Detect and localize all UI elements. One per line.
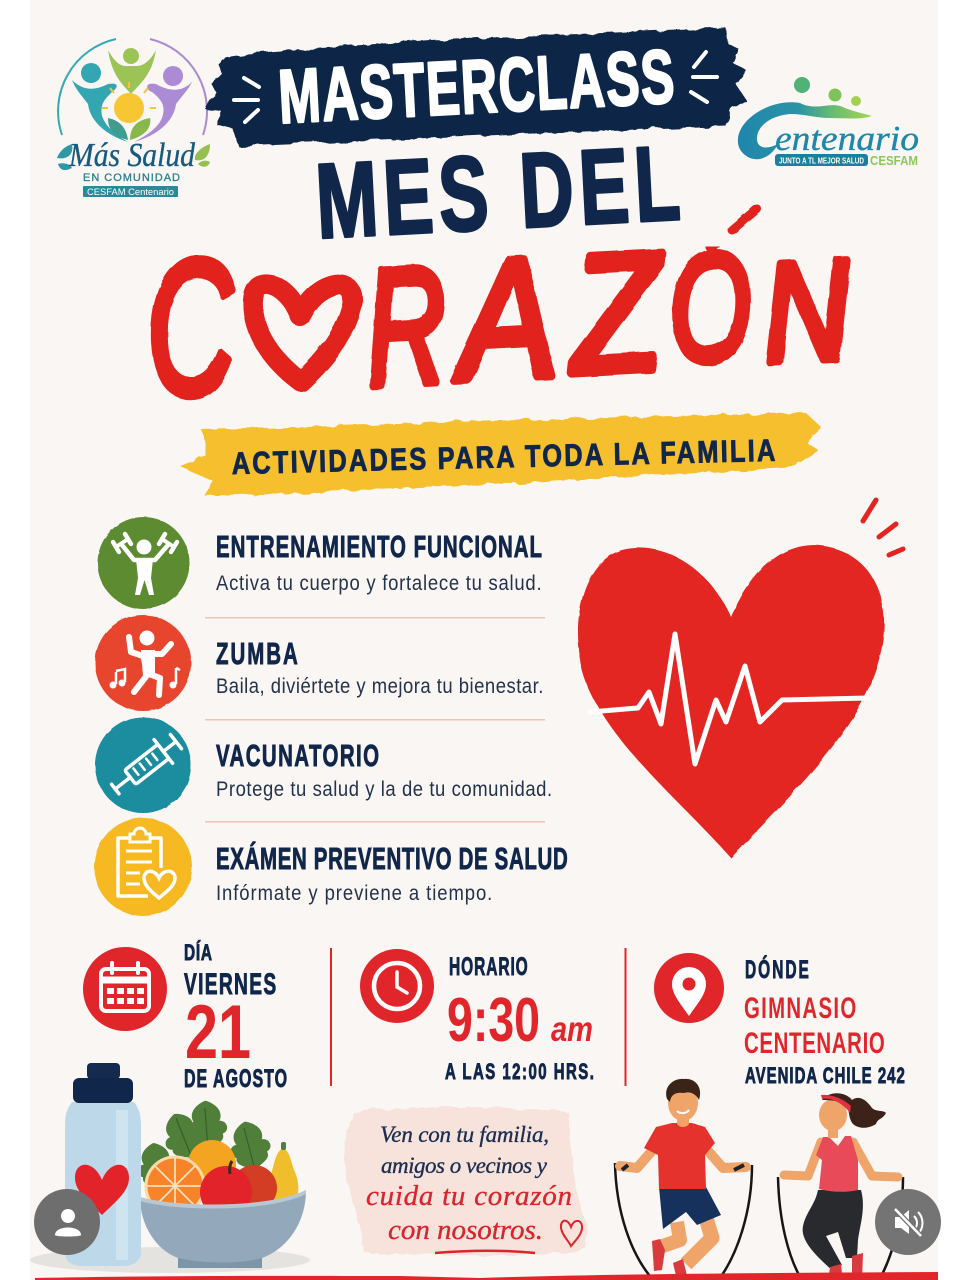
description: vacunatorio: Protege tu salud y la de tu comunidad. xyxy=(216,778,552,801)
info: location: DÓNDE xyxy=(745,955,809,984)
heading: MES DEL: MES DEL xyxy=(313,124,683,261)
illustration: water bottle xyxy=(65,1063,141,1266)
woman top xyxy=(816,1136,858,1192)
logo: Más Salud en Comunidad: EN COMUNIDAD xyxy=(83,172,180,184)
info: day xyxy=(83,940,287,1093)
icon: small heart xyxy=(561,1221,582,1246)
logo: Centenario CESFAM: CESFAM xyxy=(870,154,918,168)
activity: zumba xyxy=(95,615,543,711)
icon: dumbbell figure xyxy=(98,517,190,609)
activity: vacunatorio xyxy=(95,717,552,813)
man legs xyxy=(660,1222,680,1247)
info: day: 21 xyxy=(185,990,251,1075)
info: schedule: A LAS 12:00 HRS. xyxy=(445,1059,594,1084)
illustration: man jumping rope xyxy=(615,1079,752,1280)
man shoes xyxy=(652,1239,688,1280)
info: schedule xyxy=(360,949,594,1084)
woman shoes xyxy=(828,1253,863,1280)
title banner: MASTERCLASS xyxy=(206,28,746,146)
info: day: DE AGOSTO xyxy=(184,1066,287,1093)
logo: Más Salud en Comunidad: CESFAM Centenario xyxy=(87,187,174,198)
icon: syringe xyxy=(95,717,191,813)
description: entrenamiento: Activa tu cuerpo y fortalece tu salud. xyxy=(216,572,542,595)
activity: examen preventivo xyxy=(94,818,568,916)
pear xyxy=(268,1148,298,1206)
heading: CORAZÓN: C xyxy=(141,218,241,437)
heading: vacunatorio: VACUNATORIO xyxy=(216,738,379,773)
info: schedule: 9:30 xyxy=(447,986,540,1055)
man arms xyxy=(620,1152,746,1168)
activity: entrenamiento funcional xyxy=(98,517,542,609)
heading: CORAZÓN xyxy=(150,204,851,400)
icon: clipboard with heart xyxy=(94,818,192,916)
bottle heart xyxy=(75,1165,129,1215)
icon: calendar xyxy=(83,947,167,1031)
logo: Más Salud en Comunidad: Más Salud xyxy=(68,137,196,174)
man shorts xyxy=(659,1187,721,1229)
orange xyxy=(188,1140,236,1188)
callout: invitation: cuida tu corazón xyxy=(366,1180,572,1212)
heading: CORAZÓN: N xyxy=(759,230,854,392)
rope xyxy=(615,1163,752,1280)
info: location xyxy=(654,953,905,1088)
woman leggings xyxy=(803,1190,863,1270)
info: location: CENTENARIO xyxy=(744,1027,885,1060)
banner sparkles xyxy=(234,52,717,122)
heart sparks xyxy=(863,500,903,555)
callout: invitation: amigos o vecinos y xyxy=(381,1153,548,1178)
overlay button: muted audio xyxy=(875,1189,941,1255)
logo: Centenario CESFAM xyxy=(738,77,919,168)
heading: CORAZÓN: R xyxy=(361,233,451,422)
description: zumba: Baila, diviértete y mejora tu bienestar. xyxy=(216,675,543,698)
info: day: DÍA xyxy=(184,940,212,966)
logo: Más Salud en Comunidad xyxy=(57,39,210,198)
accent stroke xyxy=(732,209,757,230)
info: schedule: HORARIO xyxy=(449,953,528,981)
heading: CORAZÓN: Z xyxy=(563,216,670,409)
info: location: GIMNASIO xyxy=(744,992,856,1025)
logo: Centenario CESFAM: entenario xyxy=(775,119,919,158)
ECG line xyxy=(590,634,868,764)
leaves xyxy=(134,1100,275,1193)
heading: CORAZÓN: A xyxy=(445,222,561,417)
man shirt xyxy=(644,1123,715,1189)
callout: invitation xyxy=(344,1108,587,1256)
icon: clock xyxy=(360,949,434,1023)
woman arms xyxy=(784,1142,898,1177)
illustration: large heart with ECG xyxy=(578,500,903,858)
title banner: MASTERCLASS: MASTERCLASS xyxy=(276,34,676,140)
heading: entrenamiento: ENTRENAMIENTO FUNCIONAL xyxy=(216,529,542,564)
illustration: woman jumping rope xyxy=(778,1093,903,1280)
subtitle banner: actividades xyxy=(180,413,822,497)
info: schedule: am xyxy=(551,1010,593,1049)
subtitle banner: actividades: ACTIVIDADES PARA TODA LA FAMILIA xyxy=(231,433,776,482)
description: examen: Infórmate y previene a tiempo. xyxy=(216,882,492,905)
illustration: fruit bowl xyxy=(30,1100,310,1273)
icon: dancer with notes xyxy=(95,615,191,711)
callout: invitation: con nosotros. xyxy=(388,1214,543,1246)
heading: zumba: ZUMBA xyxy=(216,636,298,671)
heading: examen: EXÁMEN PREVENTIVO DE SALUD xyxy=(216,841,568,876)
info: day: VIERNES xyxy=(184,968,276,1001)
info: location: AVENIDA CHILE 242 xyxy=(745,1063,905,1088)
logo: Centenario CESFAM: JUNTO A TL MEJOR SALUD xyxy=(779,156,864,166)
orange slice xyxy=(146,1157,204,1215)
bowl xyxy=(140,1190,306,1266)
logo leaves xyxy=(57,144,72,170)
rope xyxy=(778,1177,903,1280)
bottom red brush stroke xyxy=(35,1272,938,1280)
heart letter O xyxy=(253,284,353,382)
apples xyxy=(231,1165,277,1211)
heading: CORAZÓN: Ó xyxy=(665,221,756,395)
overlay button: profile xyxy=(34,1189,100,1255)
icon: map pin xyxy=(654,953,724,1023)
callout: invitation: Ven con tu familia, xyxy=(380,1122,549,1147)
